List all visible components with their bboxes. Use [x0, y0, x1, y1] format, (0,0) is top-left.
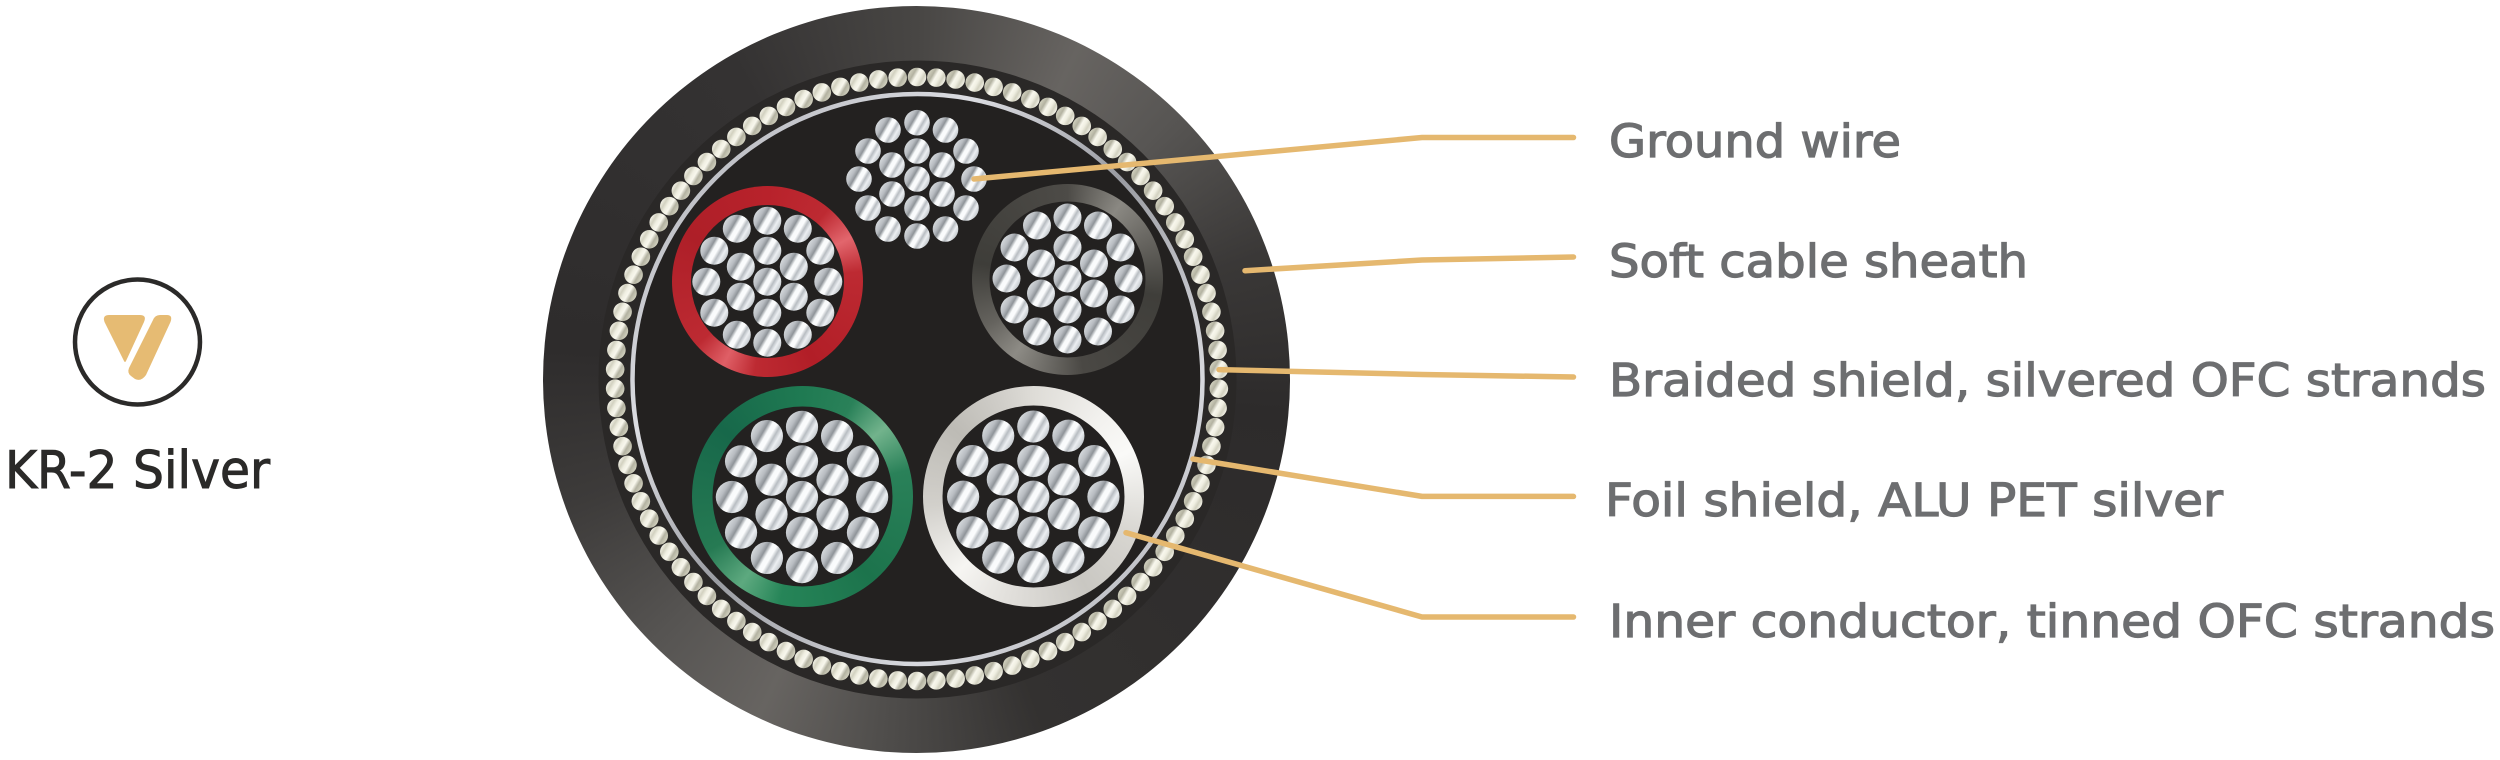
leader line: soft cable sheath [1245, 257, 1574, 271]
foil shield [632, 94, 1202, 664]
logo: brand mark in circle [75, 280, 200, 404]
green conductor [692, 386, 913, 607]
red conductor [672, 186, 863, 377]
white conductor [923, 386, 1144, 607]
leader line: braided shield [1219, 370, 1574, 377]
label: foil shield: Foil shield, ALU PET silver [1605, 474, 2224, 527]
grey conductor [972, 184, 1163, 375]
product name: KR-2 Silver [5, 441, 271, 501]
label: soft cable sheath: Soft cable sheath [1609, 235, 2028, 288]
ground wire [846, 110, 987, 249]
label: braided shield: Braided shield, silvered OFC strands [1609, 354, 2486, 407]
leader line: ground wire [974, 138, 1574, 179]
cable cross-section [543, 6, 1290, 753]
label: inner conductor: Inner conductor, tinned OFC strands [1609, 595, 2495, 648]
braided shield beads [606, 68, 1228, 690]
leader line: foil shield [1193, 459, 1574, 496]
leader line: inner conductor [1126, 533, 1574, 617]
outer jacket [543, 6, 1290, 753]
label: ground wire: Ground wire [1609, 115, 1901, 168]
inner sheath [598, 60, 1236, 698]
